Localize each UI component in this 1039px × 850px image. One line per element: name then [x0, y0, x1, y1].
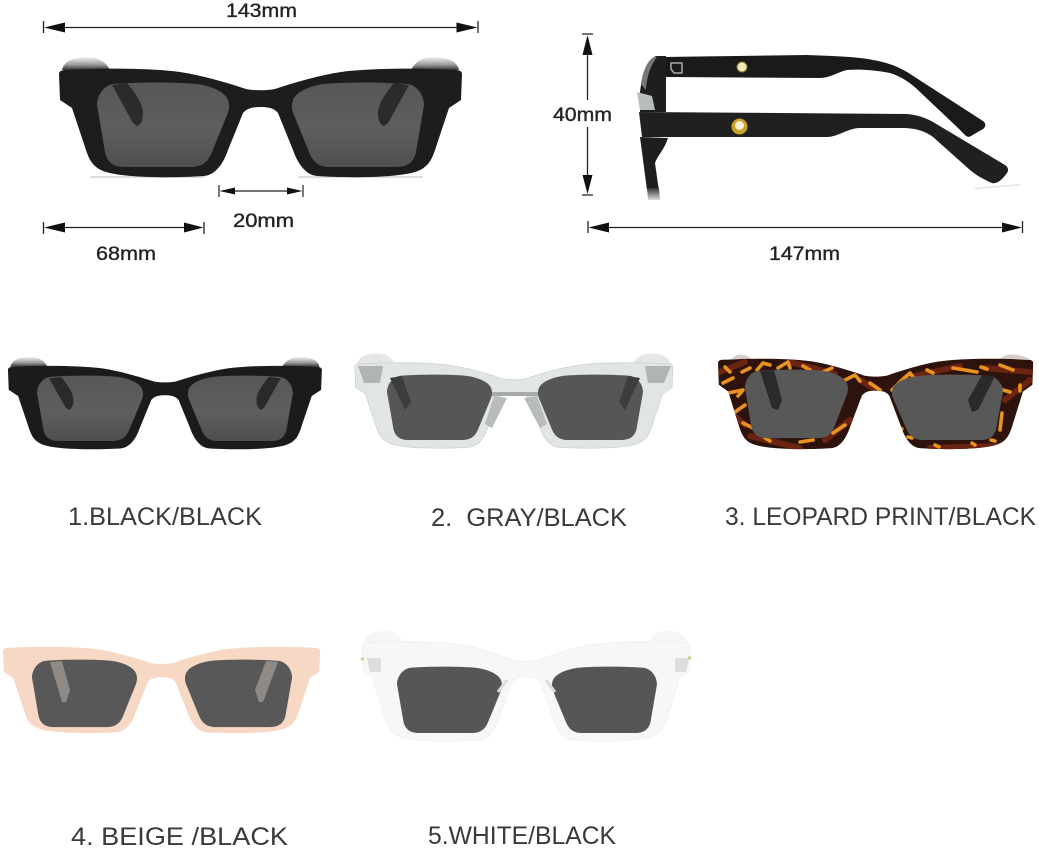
- upper rivet: [737, 62, 747, 72]
- label: leopard print: 3. LEOPARD PRINT/BLACK: [725, 503, 1036, 531]
- logo: [671, 63, 682, 73]
- dimension: temple length 147mm: [588, 221, 1022, 265]
- dimension: overall width 143mm: [44, 0, 478, 33]
- option 5: white transparent sunglasses: [361, 631, 691, 741]
- lower front frame: [640, 137, 668, 191]
- label: gray: 2. GRAY/BLACK: [431, 504, 627, 532]
- dimension: height 40mm: 40mm: [553, 104, 612, 126]
- dimension: lens width 68mm: [44, 222, 204, 265]
- upper temple arm: [662, 55, 985, 137]
- lower rivet: [732, 118, 748, 134]
- dimension: temple length 147mm: 147mm: [769, 243, 840, 265]
- side view: black sunglasses with gold rivets: [637, 55, 1020, 200]
- dimension: bridge 20mm: [219, 185, 303, 232]
- lens frame front edge: [640, 56, 666, 112]
- option 3: leopard print sunglasses: [718, 354, 1033, 449]
- label: white: 5.WHITE/BLACK: [428, 822, 616, 850]
- option 2: gray transparent sunglasses: [355, 354, 673, 448]
- ground shadow: [975, 184, 1020, 189]
- label: black: 1.BLACK/BLACK: [68, 503, 262, 531]
- dimension: lens width 68mm: 68mm: [96, 243, 156, 265]
- front view: black sunglasses: [59, 57, 462, 178]
- dimension: overall width 143mm: 143mm: [226, 0, 297, 22]
- hinge: [637, 92, 655, 110]
- option 1: black sunglasses: [8, 357, 322, 449]
- option 4: beige sunglasses: [3, 647, 320, 733]
- dimension: bridge 20mm: 20mm: [233, 210, 294, 232]
- dimension: height 40mm: [553, 34, 612, 195]
- lower temple arm: [639, 112, 1008, 183]
